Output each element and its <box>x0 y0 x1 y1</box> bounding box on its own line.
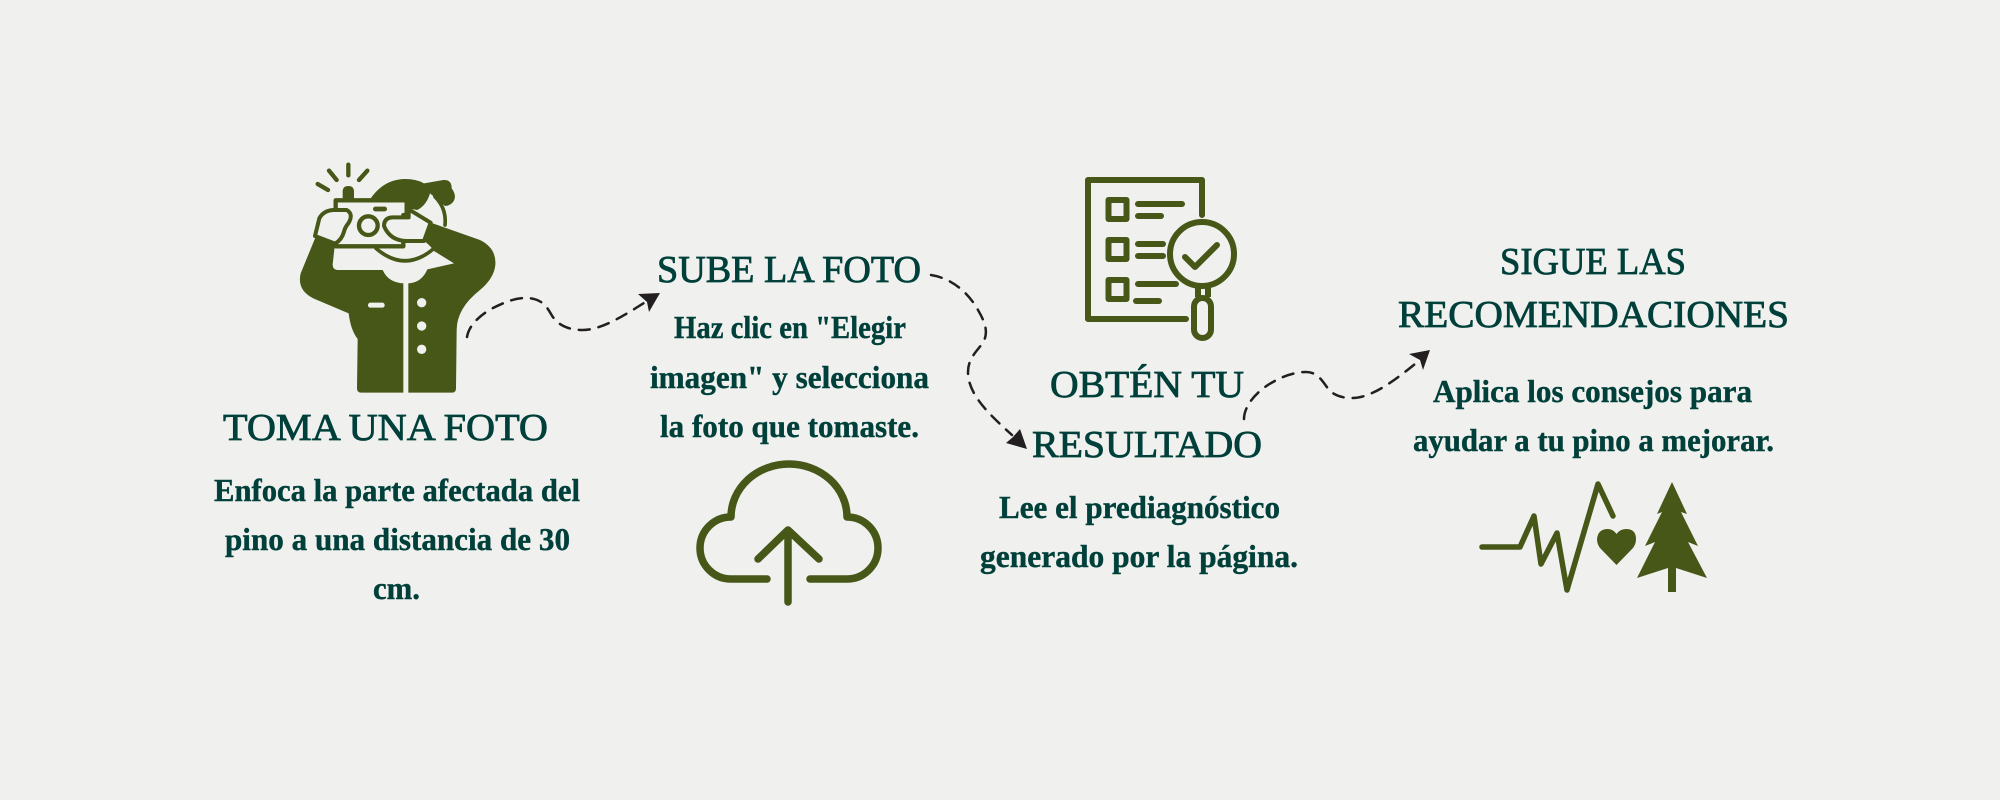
heading: toma una foto: TOMA UNA FOTO <box>223 407 548 449</box>
text: step 2 description: Haz clic en "Elegir <box>674 309 906 345</box>
heading: obtén tu resultado: OBTÉN TU <box>1050 364 1244 406</box>
panel: step 2 upload the photo <box>650 249 929 602</box>
heading: sigue las recomendaciones <box>1398 241 1789 336</box>
icon part: left hand <box>315 210 351 244</box>
icon part: camera flash bump <box>343 186 354 200</box>
arrow: step 2 to step 3 <box>931 275 1027 449</box>
icon part: chest seam and buttons <box>368 298 426 354</box>
icon part: list lines <box>1136 204 1182 301</box>
icon part: left torso and arm <box>300 236 403 393</box>
text: step 4 description <box>1413 373 1774 458</box>
text: step 4 description: Aplica los consejos para <box>1433 373 1752 409</box>
text: step 3 description <box>980 489 1298 574</box>
heading: sube la foto: SUBE LA FOTO <box>657 249 921 291</box>
icon part: check mark <box>1185 245 1217 267</box>
icon part: flash rays <box>318 165 367 190</box>
text: step 1 description: pino a una distancia de 30 <box>225 521 570 557</box>
icon part: right hand <box>384 209 431 241</box>
arrow: step 3 to step 4 <box>1244 350 1430 419</box>
text: step 1 description: Enfoca la parte afectada del <box>214 472 580 508</box>
panel: step 3 get your result <box>980 180 1298 574</box>
icon part: magnifier lens <box>1170 222 1234 286</box>
icon part: magnifier handle <box>1194 288 1211 338</box>
text: step 2 description <box>650 309 929 444</box>
text: step 2 description: la foto que tomaste. <box>660 408 919 444</box>
panel: step 1 take a photo <box>214 165 580 606</box>
icon: heart <box>1597 529 1636 565</box>
icon part: hair <box>370 179 455 210</box>
icon: photographer with camera <box>300 165 495 393</box>
text: step 1 description <box>214 472 580 606</box>
text: step 3 description: Lee el prediagnóstico <box>999 489 1280 525</box>
icon: cloud upload <box>700 464 878 602</box>
icon part: document frame <box>1088 180 1202 319</box>
text: step 2 description: imagen" y selecciona <box>650 359 929 395</box>
panel: step 4 follow the recommendations <box>1398 241 1789 592</box>
arrow: step 1 to step 2 <box>467 293 660 337</box>
heading: sigue las recomendaciones: SIGUE LAS <box>1500 241 1686 283</box>
heading: obtén tu resultado <box>1032 364 1262 466</box>
icon part: camera button <box>373 207 387 211</box>
heading: sigue las recomendaciones: RECOMENDACIONES <box>1398 294 1789 336</box>
text: step 3 description: generado por la página. <box>980 538 1298 574</box>
icon: checklist with magnifying glass <box>1088 180 1234 338</box>
icon part: head outline <box>376 197 445 261</box>
heading: obtén tu resultado: RESULTADO <box>1032 424 1262 466</box>
text: step 4 description: ayudar a tu pino a mejorar. <box>1413 422 1774 458</box>
icon part: camera lens <box>359 216 378 235</box>
icon: pine tree <box>1637 482 1707 592</box>
icon: health pulse line <box>1482 484 1613 590</box>
text: step 1 description: cm. <box>373 570 420 606</box>
icon part: checkboxes <box>1108 200 1126 299</box>
icon part: camera body <box>336 200 407 246</box>
icon part: right torso and arm <box>408 223 495 393</box>
